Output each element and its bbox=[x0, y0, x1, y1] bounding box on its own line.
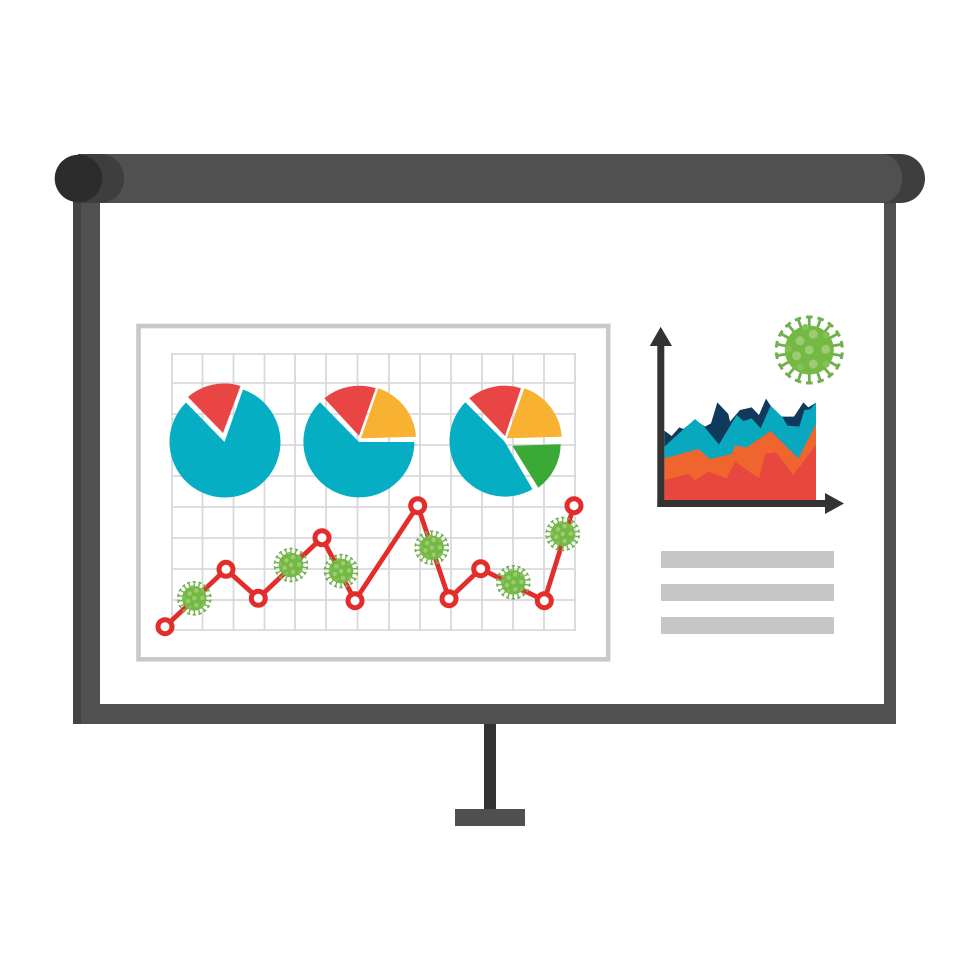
panel: pie and line charts bbox=[138, 326, 608, 659]
line chart bbox=[158, 499, 581, 634]
screen frame bbox=[73, 200, 896, 724]
teal area bbox=[664, 403, 816, 502]
red area bbox=[664, 445, 816, 502]
pie chart 3 bbox=[449, 386, 562, 497]
text placeholder bars bbox=[661, 551, 834, 634]
pie chart 2 bbox=[303, 386, 416, 497]
stand bbox=[455, 724, 525, 826]
icon: large virus bbox=[776, 317, 842, 383]
navy area bbox=[664, 399, 816, 502]
chart axes with arrows bbox=[650, 327, 844, 514]
chart grid bbox=[171, 353, 576, 631]
panel border bbox=[138, 326, 608, 659]
area chart bbox=[664, 399, 816, 502]
pie chart 1 bbox=[169, 383, 280, 497]
orange area bbox=[664, 424, 816, 502]
roller bar bbox=[55, 154, 925, 203]
virus markers on line chart bbox=[178, 518, 579, 615]
